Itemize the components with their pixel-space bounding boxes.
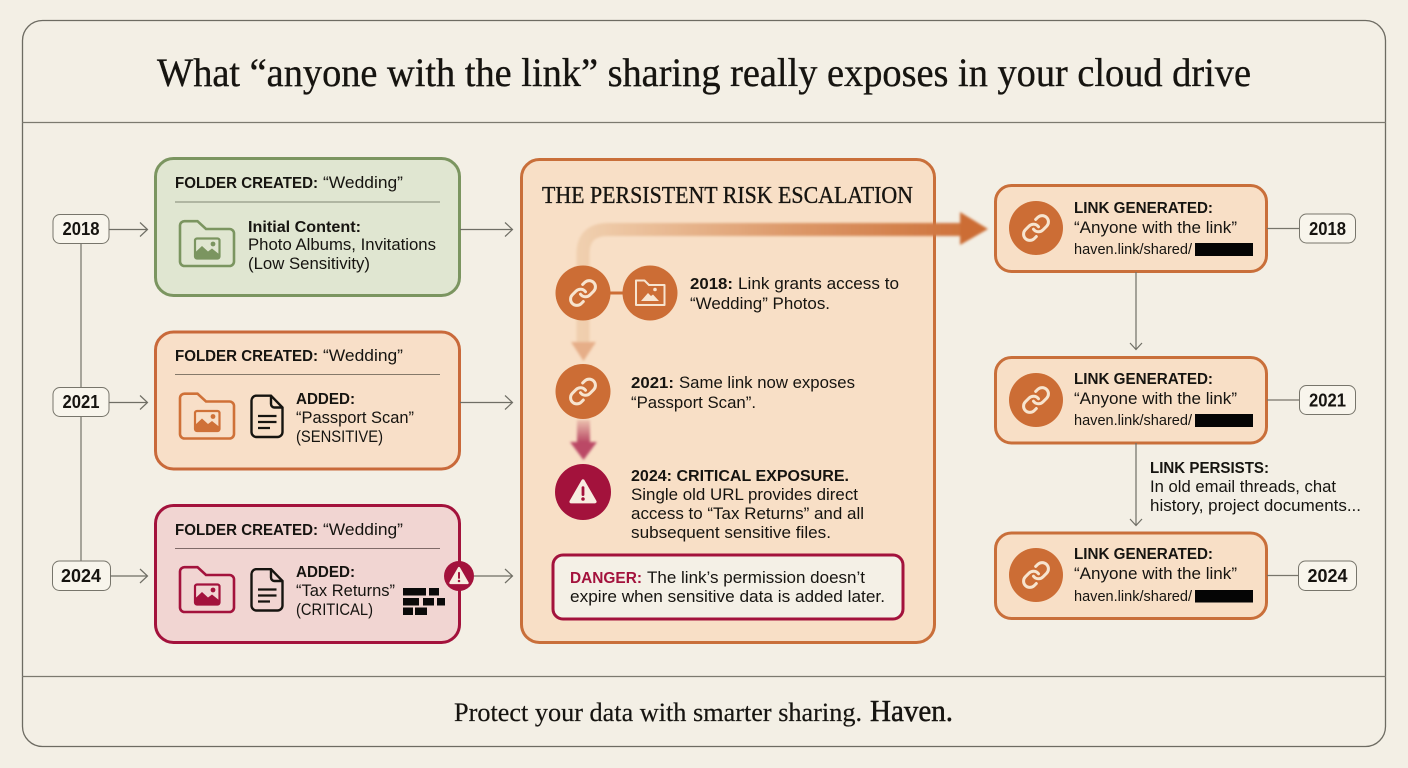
- arrow: link escalates to link cards: [571, 212, 988, 361]
- folder heading: “Wedding”: [323, 347, 403, 365]
- folder heading: “Wedding”: [323, 174, 403, 192]
- icon: document: [252, 569, 282, 610]
- year pill 2024 right: [1298, 561, 1356, 590]
- callout: danger: [553, 555, 903, 619]
- added file text: [296, 564, 395, 619]
- step text: [690, 275, 899, 313]
- step 2024: [555, 464, 864, 542]
- panel: persistent risk escalation: [522, 160, 988, 642]
- arrow: 2024 to red card: [110, 569, 148, 583]
- arrow: green card to risk panel: [460, 222, 512, 236]
- step text: access to “Tax Returns” and all: [631, 505, 864, 523]
- link text: LINK GENERATED:: [1074, 546, 1213, 563]
- link text: [1074, 371, 1237, 429]
- year pill 2018 right: 2018: [1309, 219, 1346, 239]
- added file text: ADDED:: [296, 391, 355, 408]
- folder heading: [175, 174, 403, 192]
- icon: warning badge: [444, 561, 474, 591]
- folder contents text: Initial Content:: [248, 219, 361, 236]
- folder contents text: [248, 219, 436, 273]
- arrow: 2018 to green card: [109, 222, 148, 236]
- icon: redacted blocks: [403, 588, 445, 615]
- year pill 2024: 2024: [61, 566, 101, 586]
- year pill 2024: [52, 561, 110, 590]
- link persists note: history, project documents...: [1150, 497, 1361, 515]
- arrow: orange card to risk panel: [460, 396, 512, 410]
- step text: [631, 374, 855, 412]
- step text: [631, 468, 864, 542]
- link text: LINK GENERATED:: [1074, 371, 1213, 388]
- year pill 2018: 2018: [62, 219, 100, 239]
- added file text: [296, 391, 414, 446]
- added file text: (SENSITIVE): [296, 428, 383, 446]
- arrow: link card 2021 to 2024: [1130, 443, 1142, 526]
- step 2018: [556, 266, 899, 320]
- left timeline: [52, 214, 110, 590]
- year pill 2024 right: 2024: [1308, 566, 1348, 586]
- year pill 2018 right: [1300, 214, 1356, 243]
- icon: warning circle: [555, 464, 611, 520]
- icon: link circle: [556, 266, 610, 320]
- icon: link circle: [1009, 201, 1063, 255]
- icon: folder with photo: [180, 567, 234, 612]
- icon: document: [252, 396, 282, 437]
- icon: link circle: [556, 364, 610, 419]
- step 2021: [556, 364, 855, 419]
- arrow: link card 2018 to 2021: [1130, 272, 1142, 350]
- callout: danger: expire when sensitive data is added later.: [570, 588, 885, 606]
- year pill 2021 right: [1300, 386, 1356, 414]
- added file text: “Passport Scan”: [296, 409, 414, 427]
- arrow: escalation to critical: [570, 420, 597, 460]
- panel heading: THE PERSISTENT RISK ESCALATION: [542, 183, 913, 209]
- link text: haven.link/shared/: [1074, 588, 1193, 605]
- step text: 2018:: [690, 276, 733, 293]
- icon: folder with photo: [180, 394, 234, 438]
- panel: folder 2021: [156, 332, 460, 469]
- link text: [1074, 200, 1237, 258]
- folder heading: [175, 521, 403, 539]
- panel: link card 2024: [996, 533, 1266, 618]
- callout: danger: The link’s permission doesn’t: [647, 569, 865, 587]
- step text: Link grants access to: [738, 275, 899, 293]
- folder heading: FOLDER CREATED:: [175, 175, 318, 192]
- step text: 2021:: [631, 375, 674, 392]
- link text: “Anyone with the link”: [1074, 565, 1237, 583]
- step text: Single old URL provides direct: [631, 486, 858, 504]
- icon: folder with photo: [180, 221, 234, 266]
- link text: LINK GENERATED:: [1074, 200, 1213, 217]
- year pill 2021: [53, 388, 109, 416]
- link persists note: In old email threads, chat: [1150, 478, 1336, 496]
- added file text: (CRITICAL): [296, 601, 373, 619]
- link text: haven.link/shared/: [1074, 412, 1193, 429]
- redacted url: [1195, 414, 1253, 427]
- step text: 2024: CRITICAL EXPOSURE.: [631, 468, 849, 485]
- icon: link circle: [1009, 548, 1063, 602]
- step text: Same link now exposes: [679, 374, 855, 392]
- link text: haven.link/shared/: [1074, 241, 1193, 258]
- callout: danger: DANGER:: [570, 570, 642, 587]
- folder heading: FOLDER CREATED:: [175, 348, 318, 365]
- link persists note: LINK PERSISTS:: [1150, 460, 1269, 477]
- icon: folder circle: [622, 266, 678, 320]
- panel: link card 2021: [996, 358, 1266, 443]
- link text: “Anyone with the link”: [1074, 219, 1237, 237]
- redacted url: [1195, 590, 1253, 602]
- added file text: ADDED:: [296, 564, 355, 581]
- step text: “Passport Scan”.: [631, 394, 756, 412]
- footer tagline: Haven.: [870, 693, 953, 728]
- arrow: red card to risk panel: [474, 569, 512, 583]
- step text: “Wedding” Photos.: [690, 295, 830, 313]
- step text: subsequent sensitive files.: [631, 524, 831, 542]
- folder contents text: Photo Albums, Invitations: [248, 236, 436, 254]
- link text: [1074, 546, 1237, 605]
- footer tagline: Protect your data with smarter sharing.: [454, 697, 862, 727]
- icon: link circle: [1009, 373, 1063, 427]
- year pill 2021: 2021: [62, 392, 100, 412]
- arrow: 2021 to orange card: [109, 396, 148, 410]
- title: What “anyone with the link” sharing really exposes in your cloud drive: [157, 50, 1251, 95]
- year pill 2018: [53, 214, 109, 244]
- redacted url: [1195, 243, 1253, 256]
- panel: folder 2018: [156, 158, 460, 296]
- added file text: “Tax Returns”: [296, 582, 395, 600]
- link text: “Anyone with the link”: [1074, 390, 1237, 408]
- panel: link card 2018: [996, 186, 1266, 272]
- folder heading: “Wedding”: [323, 521, 403, 539]
- folder heading: FOLDER CREATED:: [175, 522, 318, 539]
- year pill 2021 right: 2021: [1309, 390, 1346, 410]
- link persists note: [1150, 460, 1361, 515]
- folder heading: [175, 347, 403, 365]
- folder contents text: (Low Sensitivity): [248, 255, 370, 273]
- panel: folder 2024: [156, 506, 460, 642]
